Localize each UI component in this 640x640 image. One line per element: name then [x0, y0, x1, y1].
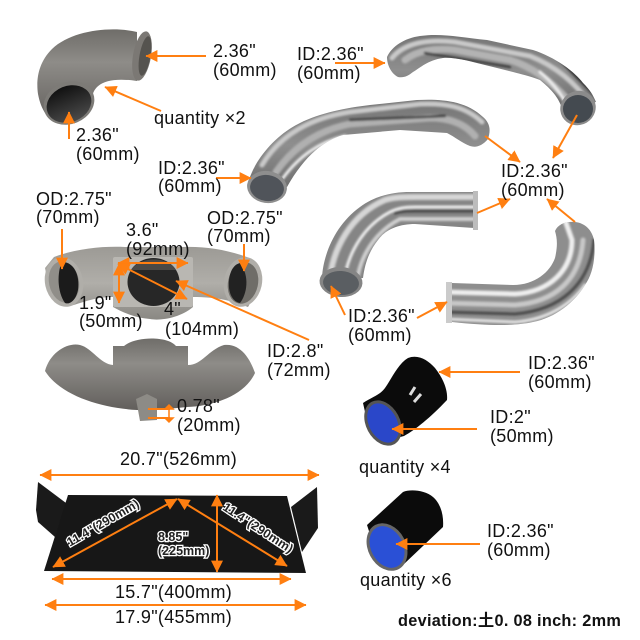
- icon: mounting tab: [136, 394, 157, 421]
- label: elbow quantity: quantity ×2: [154, 108, 246, 128]
- label: shared pipe diameter: (60mm): [501, 180, 565, 200]
- panel: polished pipe lower right: [416, 222, 594, 325]
- panel: shared pipe label: [477, 115, 577, 222]
- icon: black reducer coupler: [357, 357, 447, 452]
- label: right diagonal: 11.4"(290mm): [220, 500, 296, 556]
- label: left outer diameter: [36, 189, 112, 227]
- label: plate height: [79, 293, 143, 331]
- label: tab hole spacing: [177, 396, 241, 435]
- label: tab hole spacing: (20mm): [177, 415, 241, 435]
- icon: Y pipe front: [40, 247, 267, 320]
- icon: cast elbow pipe: [37, 29, 155, 132]
- icon: polished pipe 4: [446, 222, 594, 325]
- panel: cast elbow: [37, 29, 277, 164]
- label: left outer diameter: OD:2.75": [36, 189, 112, 209]
- arrow: pipe 1 left: [335, 62, 385, 64]
- label: pipe 2 left diameter: ID:2.36": [158, 158, 225, 178]
- arrow: pipe 3 bottom: [331, 286, 345, 315]
- label: plate height: 1.9": [79, 293, 112, 313]
- arrow: plate width: [118, 262, 188, 264]
- label: coupler diameter: ID:2.36": [487, 521, 554, 541]
- arrow: left opening: [61, 229, 63, 269]
- label: coupler quantity: quantity ×6: [360, 570, 452, 590]
- arrow: pipe 4 left: [417, 302, 447, 318]
- arrow: small end: [392, 428, 477, 430]
- label: left outer diameter: (70mm): [36, 207, 100, 227]
- arrow: pipe 2 left: [216, 177, 251, 179]
- arrow: elbow right end: [146, 55, 206, 57]
- arrow: tab hole upper: [148, 408, 170, 410]
- label: bore diameter: [267, 341, 331, 380]
- arrow: inner width: [52, 578, 291, 580]
- label: plate height: (50mm): [79, 311, 143, 331]
- panel: reducer coupler: [357, 353, 595, 477]
- label: elbow right diameter: 2.36": [213, 41, 256, 61]
- label: tab hole spacing: 0.78": [177, 396, 220, 416]
- label: plate diagonal: 4": [164, 299, 181, 319]
- label: left diagonal: 11.4"(290mm): [64, 497, 142, 549]
- arrow: pipe 2 end: [485, 136, 520, 162]
- panel: straight coupler: [358, 490, 554, 590]
- label: pipe 3 bottom diameter: [348, 306, 415, 345]
- icon: polished pipe 3: [320, 191, 478, 297]
- panel: Y pipe front view: [36, 189, 331, 380]
- label: pipe 1 left diameter: [297, 44, 364, 83]
- label: right outer diameter: OD:2.75": [207, 208, 283, 228]
- label: large end diameter: [528, 353, 595, 392]
- arrow: large end: [439, 371, 520, 373]
- icon: black straight coupler: [358, 490, 443, 578]
- label: base width: 17.9"(455mm): [115, 607, 232, 627]
- arrow: plate height: [118, 264, 120, 303]
- label: elbow right diameter: (60mm): [213, 60, 277, 80]
- label: coupler diameter: [487, 521, 554, 560]
- label: right outer diameter: (70mm): [207, 226, 271, 246]
- label: plate width: (92mm): [126, 239, 190, 259]
- arrow: pipe 4 end: [547, 199, 575, 222]
- label: right outer diameter: [207, 208, 283, 246]
- label: plate width: 3.6": [126, 220, 159, 240]
- label: pipe 2 left diameter: [158, 158, 225, 196]
- label: plate depth: [158, 530, 209, 558]
- label: plate depth: 8.85": [158, 530, 188, 544]
- arrow: tab hole spacing: [165, 405, 173, 422]
- label: small end diameter: (50mm): [490, 426, 554, 446]
- panel: polished pipe middle: [159, 100, 490, 204]
- label: large end diameter: (60mm): [528, 372, 592, 392]
- icon: polished pipe 1: [387, 35, 596, 126]
- arrow: pipe 1 end: [553, 115, 577, 158]
- label: large end diameter: ID:2.36": [528, 353, 595, 373]
- icon: Y pipe rear: [45, 338, 255, 410]
- icon: plate body: [44, 495, 306, 573]
- arrow: right opening: [243, 244, 245, 271]
- label: pipe 1 left diameter: (60mm): [297, 63, 361, 83]
- icon: left wing: [36, 482, 66, 537]
- note: deviation: deviation:土0. 08 inch: 2mm: [398, 612, 621, 630]
- arrow: left diagonal: [53, 499, 177, 567]
- label: pipe 3 bottom diameter: (60mm): [348, 325, 412, 345]
- label: shared pipe diameter: [501, 161, 568, 200]
- icon: right wing: [291, 487, 318, 552]
- label: elbow bottom diameter: [76, 125, 140, 164]
- label: pipe 3 bottom diameter: ID:2.36": [348, 306, 415, 326]
- label: small end diameter: [490, 407, 554, 446]
- panel: polished pipe top right: [298, 35, 596, 126]
- label: shared pipe diameter: ID:2.36": [501, 161, 568, 181]
- label: inner width: 15.7"(400mm): [115, 582, 232, 602]
- arrow: pipe 3 end: [477, 199, 510, 213]
- arrow: base width: [45, 604, 306, 606]
- arrow: quantity to elbow: [105, 87, 161, 111]
- label: bore diameter: ID:2.8": [267, 341, 324, 361]
- arrow: bore diameter: [176, 281, 309, 340]
- arrow: plate diagonal: [118, 264, 187, 299]
- icon: polished pipe 2: [247, 100, 490, 204]
- panel: black shroud plate: [36, 449, 319, 627]
- label: elbow bottom diameter: (60mm): [76, 144, 140, 164]
- arrow: overall width: [40, 474, 319, 476]
- arrow: right diagonal: [178, 499, 287, 566]
- arrow: coupler bore: [396, 543, 480, 545]
- label: elbow bottom diameter: 2.36": [76, 125, 119, 145]
- label: coupler diameter: (60mm): [487, 540, 551, 560]
- label: plate diagonal: [164, 299, 239, 339]
- label: overall width: 20.7"(526mm): [120, 449, 237, 469]
- label: elbow right diameter: [213, 41, 277, 80]
- arrow: elbow bottom end: [68, 112, 70, 139]
- label: bore diameter: (72mm): [267, 360, 331, 380]
- panel: polished pipe lower left: [315, 185, 480, 345]
- label: pipe 1 left diameter: ID:2.36": [297, 44, 364, 64]
- arrow: plate depth: [216, 495, 218, 572]
- label: small end diameter: ID:2": [490, 407, 531, 427]
- label: reducer quantity: quantity ×4: [359, 457, 451, 477]
- arrow: tab hole lower: [148, 417, 170, 419]
- label: plate depth: (225mm): [158, 544, 209, 558]
- label: plate diagonal: (104mm): [165, 319, 239, 339]
- label: plate width: [126, 220, 190, 259]
- label: pipe 2 left diameter: (60mm): [158, 176, 222, 196]
- panel: Y pipe rear view: [45, 338, 255, 435]
